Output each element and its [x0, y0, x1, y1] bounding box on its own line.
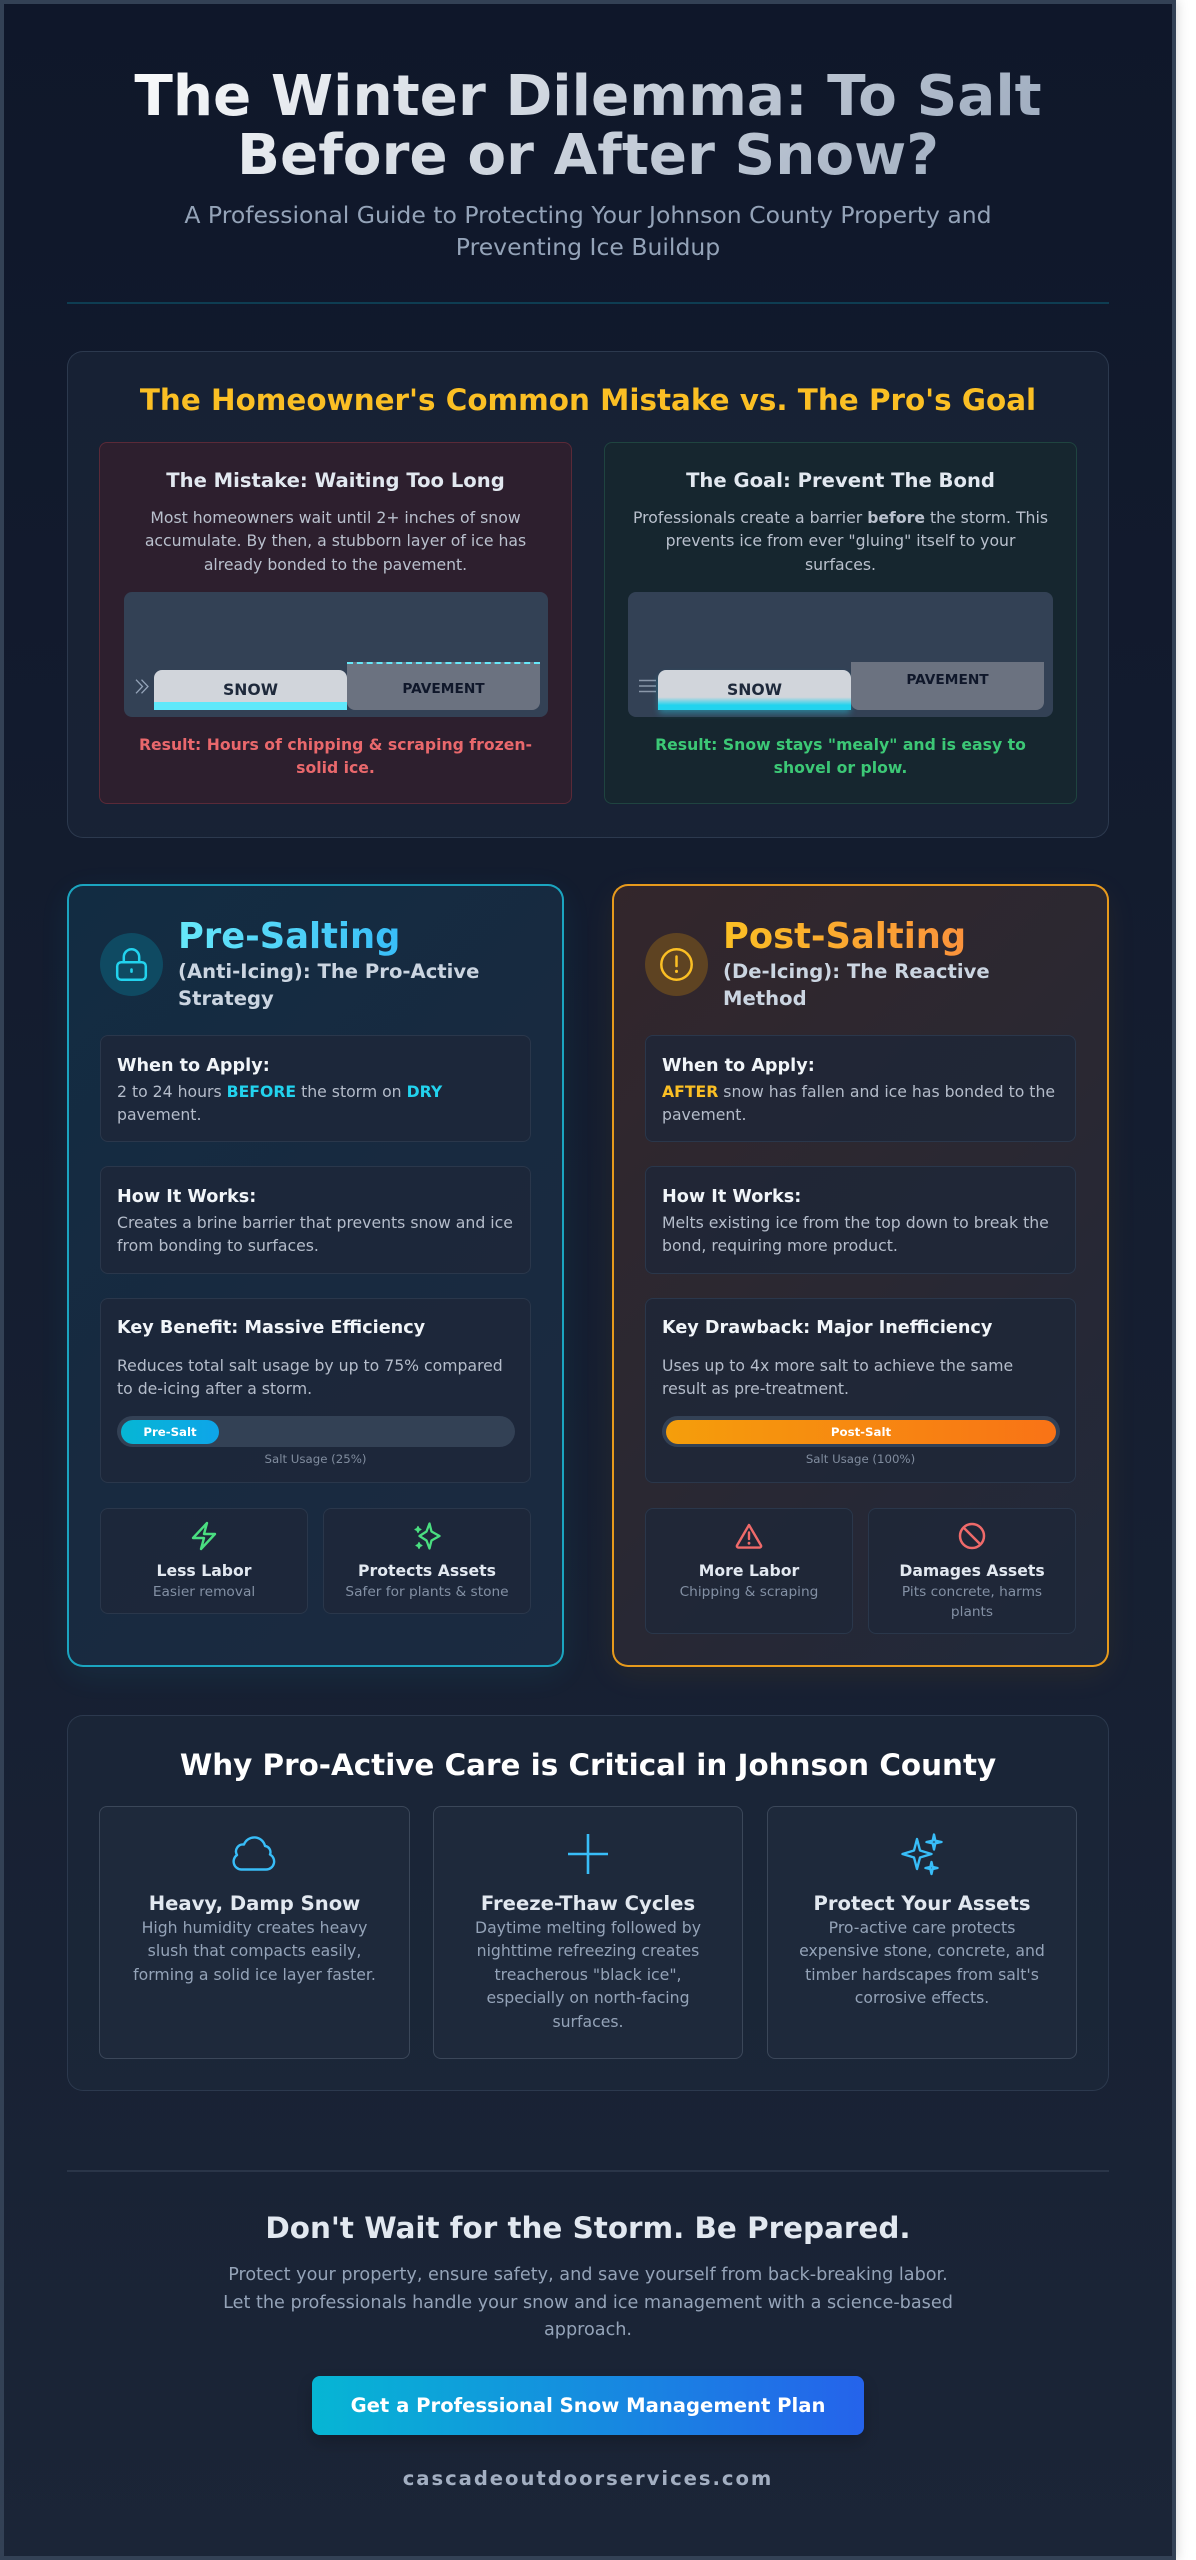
panel title: Pre-Salting: [178, 916, 400, 957]
card text: Daytime melting followed by: [475, 1918, 701, 1937]
block text: [117, 1213, 513, 1255]
card text: Pro-active care protects: [829, 1918, 1015, 1937]
cta button: [312, 2376, 864, 2435]
stat text: [902, 1584, 1042, 1620]
stat title: Less Labor: [156, 1561, 252, 1580]
block text: from bonding to surfaces.: [117, 1236, 319, 1255]
cta heading: Don't Wait for the Storm. Be Prepared.: [265, 2211, 911, 2245]
card text: Most homeowners wait until 2+ inches of snow: [150, 508, 521, 527]
result text: [655, 735, 1026, 777]
card text: already bonded to the pavement.: [204, 555, 467, 574]
card text: [475, 1918, 701, 2031]
icon: sparkles: [414, 1522, 441, 1550]
block text: bond, requiring more product.: [662, 1236, 898, 1255]
card text: slush that compacts easily,: [148, 1941, 361, 1960]
footer call to action: [67, 2170, 1109, 2490]
stat: more labor: [645, 1508, 853, 1634]
block heading: When to Apply:: [117, 1056, 270, 1076]
block: key benefit: [100, 1298, 531, 1483]
icon: sparkles: [901, 1833, 943, 1876]
block text: result as pre-treatment.: [662, 1379, 849, 1398]
card text: [633, 508, 1048, 574]
panel: post-salting: [612, 884, 1109, 1667]
panel subtitle: [723, 960, 990, 1010]
card text: [799, 1918, 1045, 2007]
icon: lines: [639, 680, 656, 692]
card text: [133, 1918, 376, 1984]
block text: 2 to 24 hours BEFORE the storm on DRY: [117, 1082, 442, 1101]
result text: solid ice.: [296, 758, 375, 777]
block: when to apply: [645, 1035, 1076, 1142]
block heading: Key Benefit: Massive Efficiency: [117, 1318, 425, 1338]
result text: [139, 735, 532, 777]
bar fill: [666, 1420, 1056, 1444]
ice strip: [154, 702, 347, 710]
pavement label: PAVEMENT: [906, 672, 989, 688]
block heading: When to Apply:: [662, 1056, 815, 1076]
stat: less labor: [100, 1508, 308, 1614]
stat text: Chipping & scraping: [680, 1584, 818, 1600]
block: how it works: [100, 1166, 531, 1274]
card text: High humidity creates heavy: [142, 1918, 367, 1937]
cta text: Let the professionals handle your snow and ice management with a science-based: [223, 2293, 953, 2313]
icon: plus: [568, 1834, 608, 1874]
card title: Freeze-Thaw Cycles: [481, 1892, 695, 1915]
panel subtitle: Method: [723, 987, 807, 1010]
title: The Winter Dilemma: To Salt: [134, 64, 1042, 129]
stat: protects assets: [323, 1508, 531, 1614]
block text: pavement.: [662, 1105, 746, 1124]
card title: The Goal: Prevent The Bond: [686, 469, 995, 492]
block text: [662, 1356, 1013, 1398]
card text: accumulate. By then, a stubborn layer of ice has: [145, 531, 526, 550]
stat title: Damages Assets: [899, 1561, 1045, 1580]
block: key drawback: [645, 1298, 1076, 1483]
block text: [662, 1213, 1049, 1255]
card text: [145, 508, 526, 574]
website url: cascadeoutdoorservices.com: [403, 2467, 773, 2490]
bar fill: Pre-Salt: [143, 1425, 197, 1439]
icon: warning circle: [645, 933, 708, 996]
card: protect your assets: [767, 1806, 1077, 2059]
subtitle: [184, 201, 992, 261]
bar fill: Post-Salt: [831, 1425, 891, 1439]
bar fill: [121, 1420, 219, 1444]
icon: warning triangle: [736, 1524, 762, 1549]
stat title: More Labor: [699, 1561, 799, 1580]
block: when to apply: [100, 1035, 531, 1142]
card text: prevents ice from ever "gluing" itself to your: [666, 531, 1015, 550]
bar chart: salt usage 25%: [117, 1416, 515, 1447]
bar caption: Salt Usage (100%): [806, 1452, 915, 1466]
card title: Protect Your Assets: [813, 1892, 1031, 1915]
title: [67, 68, 1109, 186]
stat title: Protects Assets: [358, 1561, 496, 1580]
subtitle: A Professional Guide to Protecting Your Johnson County Property and: [184, 201, 992, 229]
block text: Creates a brine barrier that prevents snow and ice: [117, 1213, 513, 1232]
diagram: ice bonded: [124, 592, 548, 717]
stat text: Safer for plants & stone: [345, 1584, 509, 1600]
result text: shovel or plow.: [774, 758, 907, 777]
stat text: plants: [951, 1604, 993, 1620]
panel subtitle: [178, 960, 479, 1010]
panel subtitle: Strategy: [178, 987, 274, 1010]
snow layer: [658, 670, 851, 710]
pavement layer: [347, 662, 540, 710]
block: how it works: [645, 1166, 1076, 1274]
block text: [117, 1082, 442, 1124]
result text: Result: Snow stays "mealy" and is easy to: [655, 735, 1026, 754]
title: Before or After Snow?: [237, 123, 939, 188]
card text: forming a solid ice layer faster.: [133, 1965, 376, 1984]
result text: Result: Hours of chipping & scraping frozen-: [139, 735, 532, 754]
card text: surfaces.: [805, 555, 876, 574]
block text: to de-icing after a storm.: [117, 1379, 312, 1398]
panel subtitle: (De-Icing): The Reactive: [723, 960, 990, 982]
card title: Heavy, Damp Snow: [149, 1892, 360, 1915]
snow layer: [154, 670, 347, 710]
card: freeze-thaw cycles: [433, 1806, 743, 2059]
card: heavy damp snow: [99, 1806, 410, 2059]
panel subtitle: (Anti-Icing): The Pro-Active: [178, 960, 479, 982]
snow label: SNOW: [727, 680, 782, 698]
block text: [662, 1082, 1055, 1124]
cta text: Protect your property, ensure safety, and save yourself from back-breaking labor.: [228, 2265, 948, 2285]
panel title: Post-Salting: [723, 916, 966, 957]
block heading: Key Drawback: Major Inefficiency: [662, 1318, 992, 1338]
stat: damages assets: [868, 1508, 1076, 1634]
card text: Professionals create a barrier before the storm. This: [633, 508, 1048, 527]
card text: timber hardscapes from salt's: [805, 1965, 1039, 1984]
card: the goal: [604, 442, 1077, 804]
block text: [117, 1356, 503, 1398]
diagram: barrier: [628, 592, 1053, 717]
stat text: Easier removal: [153, 1584, 255, 1600]
icon: chevrons: [136, 679, 149, 694]
cta button: Get a Professional Snow Management Plan: [351, 2394, 825, 2417]
card title: The Mistake: Waiting Too Long: [166, 469, 505, 492]
cta text: approach.: [544, 2320, 632, 2340]
heading: why pro-active care: Why Pro-Active Care is Critical in Johnson County: [180, 1748, 996, 1782]
block text: Melts existing ice from the top down to break the: [662, 1213, 1049, 1232]
panel: common mistake vs goal: [67, 351, 1109, 838]
panel: why pro-active care: [67, 1715, 1109, 2091]
card text: treacherous "black ice",: [494, 1965, 682, 1984]
icon: cloud: [232, 1836, 276, 1871]
pavement label: PAVEMENT: [402, 681, 485, 697]
heading: mistake vs goal: The Homeowner's Common Mistake vs. The Pro's Goal: [140, 383, 1036, 417]
card text: especially on north-facing: [486, 1988, 690, 2007]
cta text: [223, 2265, 953, 2340]
block text: AFTER snow has fallen and ice has bonded to the: [662, 1082, 1055, 1101]
block text: Reduces total salt usage by up to 75% compared: [117, 1356, 503, 1375]
bar chart: salt usage 100%: [662, 1416, 1060, 1447]
block heading: How It Works:: [662, 1187, 801, 1207]
icon: bolt: [192, 1522, 216, 1550]
card text: nighttime refreezing creates: [477, 1941, 699, 1960]
snow label: SNOW: [223, 680, 278, 698]
icon: lock: [100, 933, 163, 996]
icon: prohibited: [958, 1522, 986, 1550]
stat text: Pits concrete, harms: [902, 1584, 1042, 1600]
card text: surfaces.: [552, 2012, 624, 2031]
block heading: How It Works:: [117, 1187, 256, 1207]
card text: expensive stone, concrete, and: [799, 1941, 1045, 1960]
header: [134, 64, 1042, 261]
bar caption: Salt Usage (25%): [265, 1452, 366, 1466]
subtitle: Preventing Ice Buildup: [456, 233, 720, 261]
panel: pre-salting: [67, 884, 564, 1667]
pavement layer: [851, 662, 1044, 710]
card: the mistake: [99, 442, 572, 804]
block text: pavement.: [117, 1105, 201, 1124]
card text: corrosive effects.: [855, 1988, 989, 2007]
block text: Uses up to 4x more salt to achieve the same: [662, 1356, 1013, 1375]
